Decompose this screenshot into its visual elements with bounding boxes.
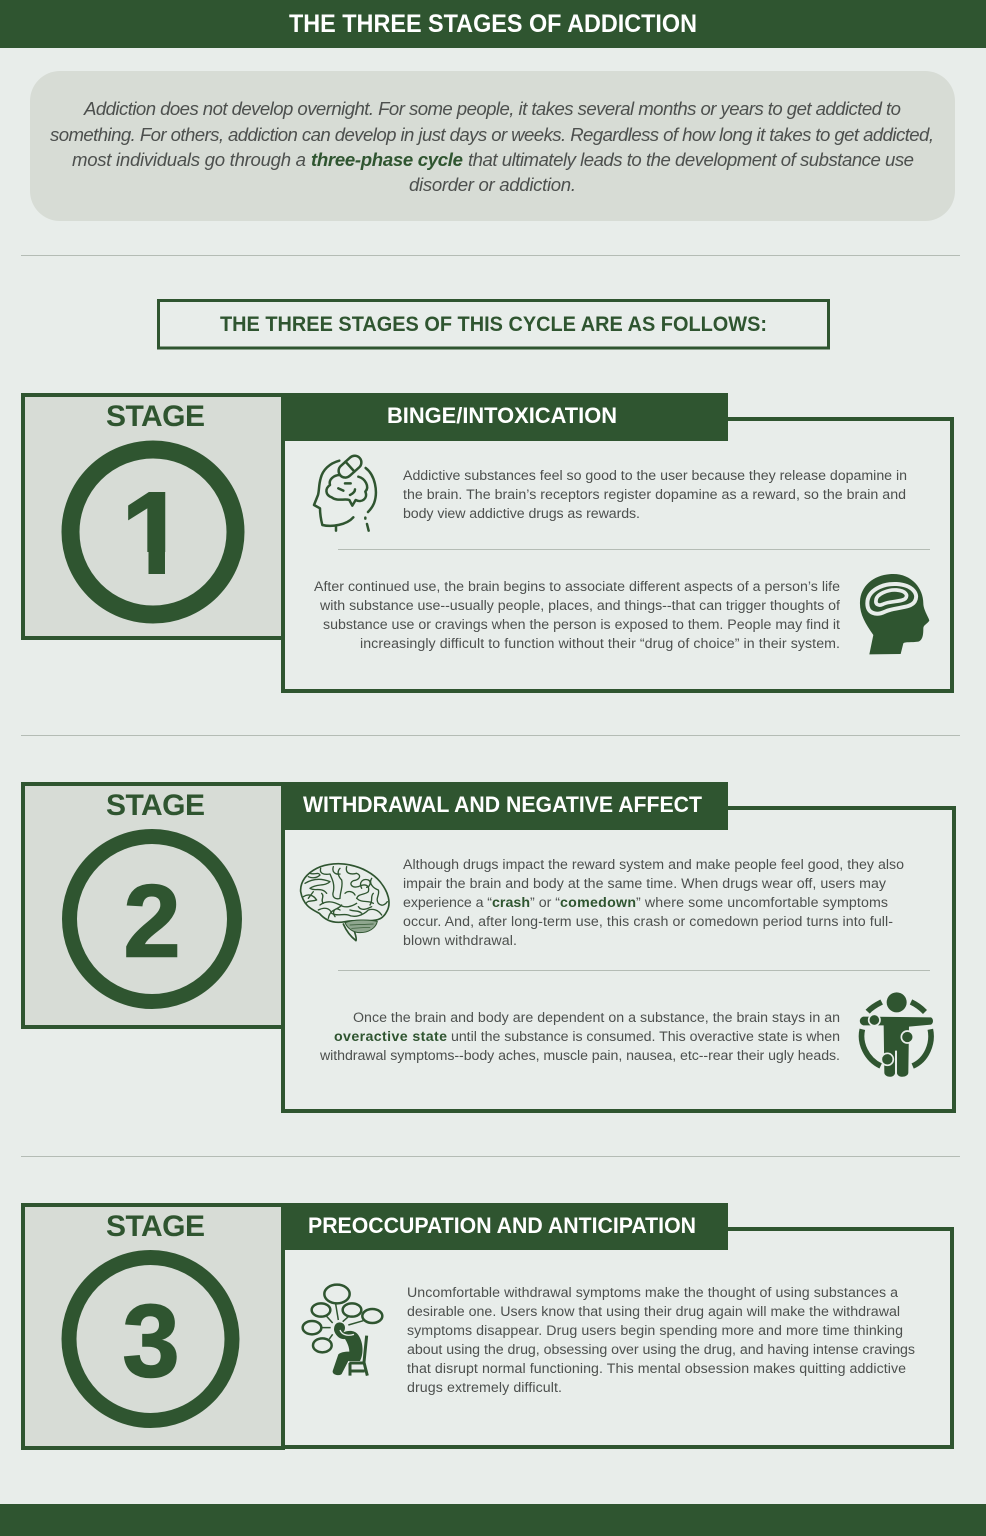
text: crash and comedown: experience a “ bbox=[403, 895, 492, 911]
text: mental obsession bbox=[407, 1285, 915, 1396]
text: mental obsession: about using the drug, obsessing over using the drug, and having intense cravings bbox=[407, 1342, 915, 1358]
stage 2 number badge: 2 bbox=[123, 864, 181, 978]
footer bar bbox=[0, 1504, 986, 1536]
stage 3 heading bbox=[281, 1203, 728, 1250]
stage 3 number badge: 3 bbox=[122, 1284, 180, 1398]
icon: head silhouette with spiral brain bbox=[860, 574, 929, 654]
text: crash and comedown: comedown bbox=[560, 895, 636, 911]
text: crash and comedown: crash bbox=[492, 895, 530, 911]
stage 2 content box bbox=[283, 808, 954, 1111]
text: overactive state: withdrawal symptoms--body aches, muscle pain, nausea, etc--rear their ugly heads. bbox=[319, 1048, 840, 1064]
text: crash and comedown: ” or “ bbox=[530, 895, 560, 911]
text: mental obsession: symptoms disappear. Drug users begin spending more and more time thinking bbox=[407, 1323, 903, 1339]
heading: three stages of this cycle: THE THREE STAGES OF THIS CYCLE ARE AS FOLLOWS: bbox=[220, 312, 767, 336]
panel: introduction: most individuals go through a bbox=[72, 149, 306, 170]
text: crash and comedown: blown withdrawal. bbox=[403, 933, 517, 949]
text: crash and comedown bbox=[403, 857, 904, 949]
text: mental obsession: that disrupt normal functioning. This mental obsession makes quitting addictive bbox=[407, 1361, 906, 1377]
title banner bbox=[0, 0, 986, 48]
text: mental obsession: drugs extremely difficult. bbox=[407, 1380, 562, 1396]
panel: stage 1 bbox=[23, 393, 952, 691]
panel: introduction: that ultimately leads to the development of substance use bbox=[468, 149, 914, 170]
text: crash and comedown: impair the brain and body at the same time. When drugs wear off, users may bbox=[403, 876, 887, 892]
panel: introduction: three-phase cycle bbox=[311, 149, 463, 170]
stage 1 heading: BINGE/INTOXICATION bbox=[387, 403, 617, 428]
text: mental obsession: desirable one. Users know that using their drug again will make the withdrawal bbox=[407, 1304, 900, 1320]
stage 3 content box bbox=[283, 1229, 952, 1447]
stage 2 number badge: STAGE bbox=[106, 789, 205, 822]
stage 1 number badge bbox=[23, 395, 283, 638]
stage 2 number badge bbox=[23, 784, 283, 1027]
stage 3 number badge bbox=[23, 1205, 283, 1448]
text: mental obsession: Uncomfortable withdrawal symptoms make the thought of using substances a bbox=[407, 1285, 898, 1301]
stage 3 number badge: STAGE bbox=[106, 1210, 205, 1243]
heading: three stages of this cycle bbox=[158, 300, 828, 348]
panel: stage 3 bbox=[23, 1203, 952, 1448]
text: dopamine reward: the brain. The brain’s receptors register dopamine as a reward, so the brain and bbox=[403, 487, 906, 503]
stage 1 number badge: 1 bbox=[121, 468, 186, 598]
text: crash and comedown: Although drugs impact the reward system and make people feel good, they also bbox=[403, 857, 904, 873]
text: association and triggers: increasingly difficult to function without their “drug of choice” in their system. bbox=[360, 636, 840, 652]
icon: seated person with thought bubbles bbox=[303, 1285, 382, 1376]
text: overactive state: overactive state bbox=[334, 1029, 447, 1045]
text: dopamine reward bbox=[403, 468, 907, 522]
stage 1 number badge: STAGE bbox=[106, 400, 205, 433]
text: association and triggers bbox=[314, 579, 840, 652]
text: crash and comedown: occur. And, after long-term use, this crash or comedown period turns into full- bbox=[403, 914, 893, 930]
panel: introduction: disorder or addiction. bbox=[409, 174, 576, 195]
stage 1 content box bbox=[283, 419, 952, 691]
panel: introduction: Addiction does not develop overnight. For some people, it takes several months or years to get addicted to bbox=[83, 98, 901, 119]
stage 2 heading: WITHDRAWAL AND NEGATIVE AFFECT bbox=[303, 792, 703, 817]
panel: stage 2 bbox=[23, 782, 954, 1111]
text: dopamine reward: body view addictive drugs as rewards. bbox=[403, 506, 640, 522]
text: association and triggers: with substance use--usually people, places, and things--that can trigger thoughts of bbox=[319, 598, 840, 614]
panel: introduction: something. For others, addiction can develop in just days or weeks. Regardless of how long it takes to get addicted, bbox=[50, 124, 934, 145]
icon: brain bbox=[301, 864, 389, 941]
stage 2 heading bbox=[281, 782, 728, 830]
text: overactive state bbox=[319, 1010, 840, 1064]
title banner: THE THREE STAGES OF ADDICTION bbox=[289, 10, 697, 38]
text: overactive state: Once the brain and body are dependent on a substance, the brain stays in an bbox=[353, 1010, 840, 1026]
text: crash and comedown: ” where some uncomfortable symptoms bbox=[636, 895, 888, 911]
text: overactive state: until the substance is consumed. This overactive state is when bbox=[451, 1029, 840, 1045]
stage 3 heading: PREOCCUPATION AND ANTICIPATION bbox=[308, 1213, 696, 1238]
text: association and triggers: substance use or cravings when the person is exposed to them. People may find it bbox=[323, 617, 840, 633]
text: association and triggers: After continued use, the brain begins to associate different aspects of a person’s life bbox=[314, 579, 840, 595]
text: dopamine reward: Addictive substances feel so good to the user because they release dopamine in bbox=[403, 468, 907, 484]
stage 1 heading bbox=[281, 393, 728, 441]
icon: head with pill and brain bbox=[314, 453, 376, 531]
icon: body with pain points bbox=[860, 992, 933, 1077]
panel: introduction bbox=[30, 71, 955, 221]
